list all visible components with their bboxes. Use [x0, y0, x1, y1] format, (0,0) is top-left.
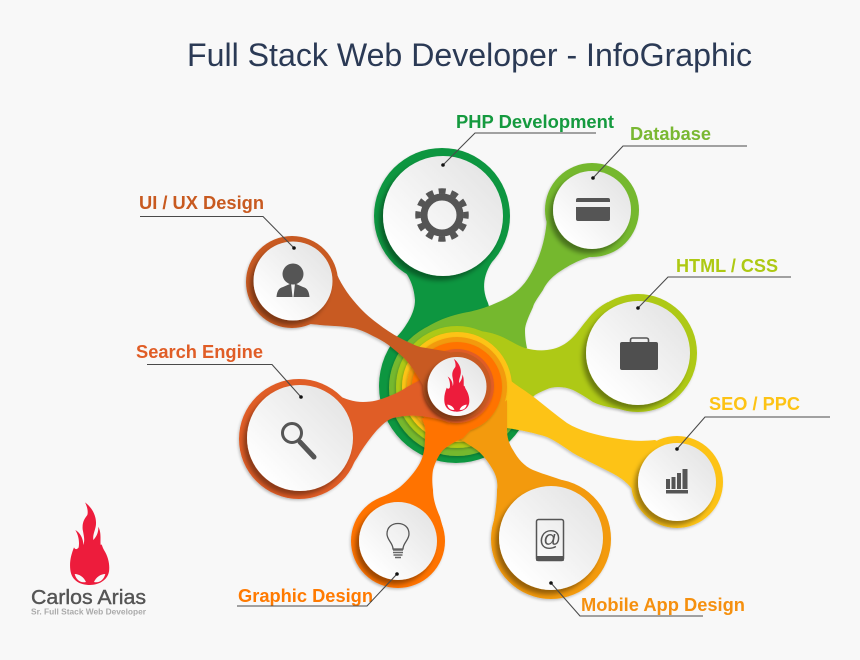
icon: phone with at sign: @: [539, 526, 561, 551]
node: briefcase: [586, 301, 690, 405]
icon: bar chart: [666, 469, 688, 494]
label: Search Engine: Search Engine: [136, 342, 263, 362]
arm: PHP Development: [374, 148, 533, 463]
arm: Database: [389, 163, 639, 456]
label: Database: [591, 124, 747, 180]
label: SEO / PPC: [675, 394, 830, 451]
icon: person: [276, 264, 310, 297]
title: Full Stack Web Developer - InfoGraphic: [187, 37, 752, 73]
icon: magnifier: [282, 424, 314, 457]
arm: UI / UX Design: [246, 236, 491, 420]
label: PHP Development: PHP Development: [456, 112, 614, 132]
icon: briefcase: [620, 338, 658, 370]
arm: Graphic Design: [351, 342, 502, 588]
label: Graphic Design: [237, 572, 399, 606]
label: Mobile App Design: [549, 581, 745, 616]
arm: Search Engine: [239, 349, 494, 499]
label: SEO / PPC: SEO / PPC: [709, 394, 800, 414]
label: PHP Development: [441, 112, 614, 167]
node: phone: [499, 486, 603, 590]
logo: Carlos Arias: Carlos Arias: [31, 587, 146, 609]
icon: logo flame: [70, 502, 109, 585]
node: chart: [638, 443, 716, 521]
arm: HTML / CSS: [396, 294, 697, 448]
label: Search Engine: [136, 342, 303, 399]
label: Mobile App Design: Mobile App Design: [581, 595, 745, 615]
icon: center flame: [444, 359, 469, 412]
node: user: [254, 242, 332, 320]
logo: Carlos Arias: [31, 502, 147, 616]
label: HTML / CSS: [636, 256, 791, 310]
icon: credit card: [576, 198, 610, 221]
node: card: [553, 171, 631, 249]
node: center flame: [428, 357, 486, 416]
icon: light bulb: [387, 524, 409, 558]
label: Graphic Design: Graphic Design: [238, 586, 373, 606]
label: UI / UX Design: UI / UX Design: [139, 193, 264, 213]
label: Database: Database: [630, 124, 711, 144]
node: gear: [383, 156, 503, 276]
node: magnifier: [247, 385, 353, 491]
diagram: radial skill tree: [239, 148, 723, 599]
arm: Mobile App Design: [407, 337, 611, 599]
label: UI / UX Design: [139, 193, 296, 250]
logo: Carlos Arias: Sr. Full Stack Web Developer: [31, 606, 147, 616]
node: bulb: [359, 502, 437, 580]
icon: gear: [418, 191, 466, 239]
arm: SEO / PPC: [402, 332, 723, 528]
label: HTML / CSS: HTML / CSS: [676, 256, 778, 276]
